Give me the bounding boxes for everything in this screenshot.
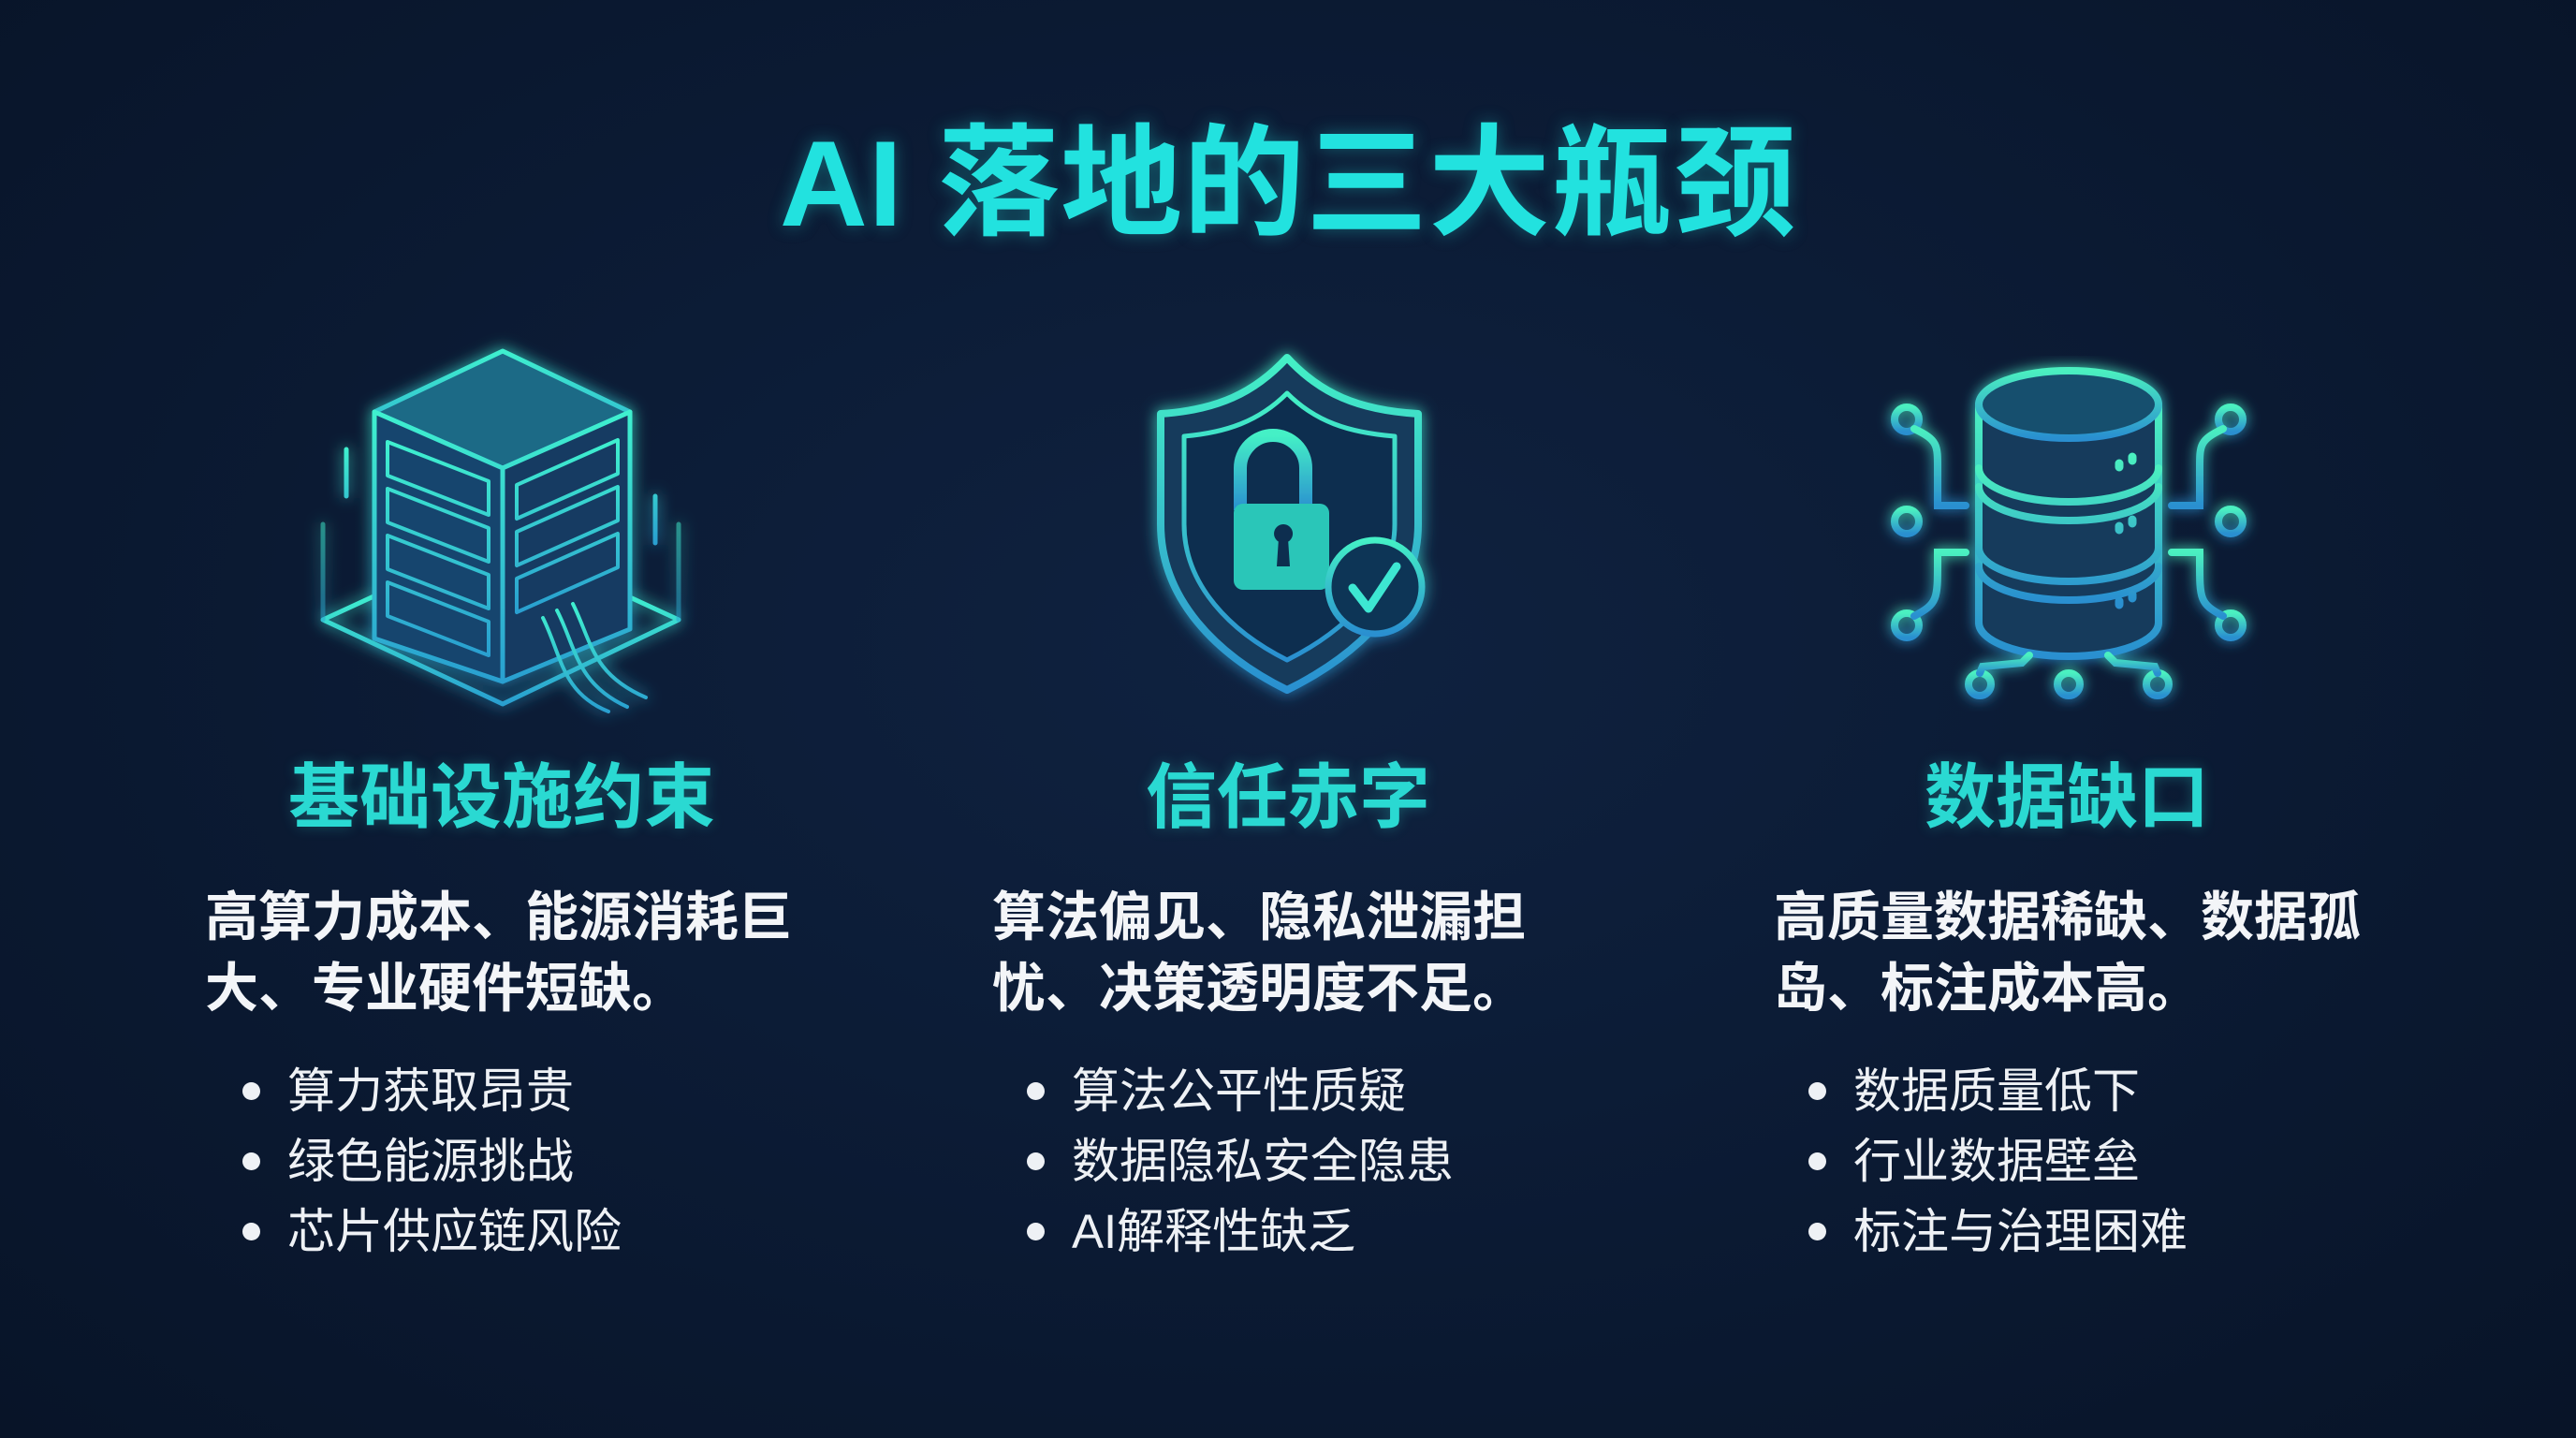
text: desc col2 [992,888,1526,1019]
bullets col3: 行业数据壁垒 [1853,1135,2140,1188]
text: desc col3: 高质量数据稀缺、数据孤 [1774,888,2361,947]
text: desc col3: 岛、标注成本高。 [1774,959,2201,1019]
text: desc col2: 忧、决策透明度不足。 [992,959,1526,1019]
heading: 信任赤字: 信任赤字 [1146,758,1430,838]
bullets col2 [1027,1064,1454,1258]
bullets col3 [1808,1064,2188,1258]
text: desc col2: 算法偏见、隐私泄漏担 [992,888,1526,947]
bullets col1: 绿色能源挑战 [287,1135,574,1188]
title: AI 落地的三大瓶颈 [780,115,1796,252]
bullets col2: 算法公平性质疑 [1072,1064,1406,1118]
text: desc col1 [205,888,792,1019]
heading: 基础设施约束: 基础设施约束 [288,758,715,838]
bullets col3: 数据质量低下 [1853,1064,2140,1118]
text: desc col1: 高算力成本、能源消耗巨 [205,888,792,947]
text: desc col3 [1774,888,2361,1019]
bullets col1 [242,1064,622,1258]
icon: shield [1145,345,1436,702]
icon: database [1881,356,2256,708]
bullets col3: 标注与治理困难 [1853,1205,2188,1258]
bullets col1: 芯片供应链风险 [287,1205,622,1258]
bullets col1: 算力获取昂贵 [287,1064,574,1118]
icon: server [312,339,690,720]
bullets col2: 数据隐私安全隐患 [1072,1135,1454,1188]
heading: 数据缺口: 数据缺口 [1925,758,2209,838]
text: desc col1: 大、专业硬件短缺。 [205,959,685,1019]
bullets col2: AI解释性缺乏 [1072,1205,1355,1258]
